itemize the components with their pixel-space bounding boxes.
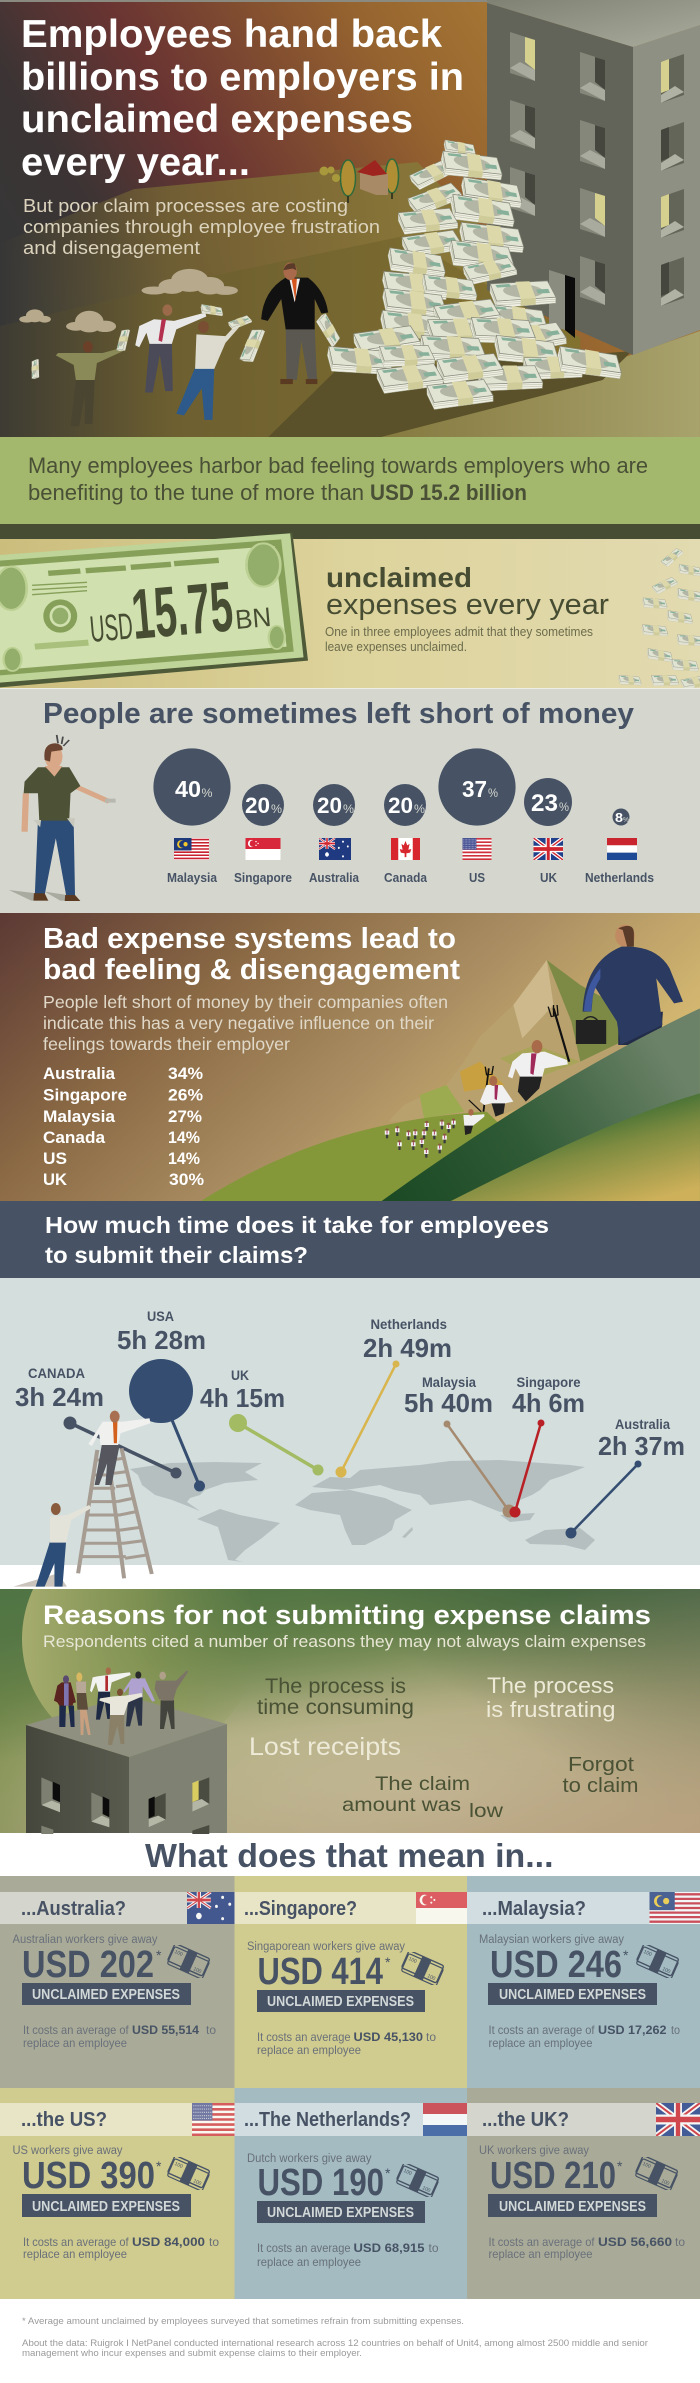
heading [43, 923, 460, 986]
group of people [54, 1667, 188, 1745]
reason: the process is time consuming [257, 1674, 414, 1719]
footnotes [22, 2316, 648, 2359]
bubble chart [153, 748, 630, 826]
bubble: Netherlands 8% [612, 808, 630, 826]
man in white shirt, back view [99, 1689, 142, 1745]
card text: UNCLAIMED EXPENSES [267, 1994, 414, 2010]
pin: Malaysia [444, 1420, 516, 1518]
panel: reasons for not submitting expense claims [0, 1589, 700, 1834]
country percentage table: 27% [168, 1107, 202, 1126]
country labels: Malaysia [167, 870, 218, 885]
card text: Australian workers give away [12, 1934, 158, 1946]
time labels: CANADA [28, 1365, 85, 1381]
subtitle: But poor claim processes are costing [23, 195, 348, 216]
card text: It costs an average of [23, 2235, 129, 2249]
country percentage table: 26% [168, 1086, 203, 1104]
time labels: 3h 24m [15, 1382, 104, 1412]
reason: the claim amount was low [342, 1773, 504, 1822]
country labels: US [469, 870, 485, 885]
card text: * [617, 2158, 623, 2174]
hills and mountain [201, 960, 670, 1201]
country percentage table: 14% [168, 1149, 200, 1168]
ladder [78, 1448, 152, 1578]
card text: replace an employee [257, 2043, 361, 2057]
flags row [174, 838, 637, 860]
card text: to [671, 2023, 680, 2037]
card text: * [156, 1947, 162, 1963]
country labels: Canada [384, 870, 428, 885]
figure: boss in black suit [261, 262, 328, 384]
bubble: US 37%: % [488, 786, 498, 800]
card text: to [675, 2235, 685, 2249]
pin: Australia [566, 1460, 642, 1538]
heading: Bad expense systems lead to [43, 923, 456, 955]
card text: * [156, 2158, 162, 2174]
country percentage table: Singapore [43, 1086, 127, 1104]
woman with blond hair [76, 1672, 91, 1735]
reason: the process is time consuming: The process is [265, 1674, 406, 1698]
card text: It costs an average [257, 2030, 351, 2044]
country percentage table [43, 1064, 204, 1189]
country labels: Netherlands [585, 870, 654, 885]
card text: to [426, 2030, 436, 2044]
card text: Singaporean workers give away [247, 1941, 405, 1953]
country labels: Australia [309, 870, 360, 885]
card text: * [385, 1954, 391, 1970]
country percentage table: Canada [43, 1128, 106, 1147]
pin: Canada [64, 1416, 182, 1478]
reason: the claim amount was low: amount was [342, 1794, 461, 1816]
title: Employees hand back [21, 13, 442, 56]
bubble: Canada 20%: % [414, 802, 425, 816]
footnotes: management who incur expenses and submit expense claims to their employer. [22, 2348, 362, 2359]
card text: It costs an average of [488, 2235, 595, 2249]
figure: man in white shirt [135, 304, 206, 393]
card text: USD 56,660 [598, 2235, 672, 2249]
statement text: benefiting to the tune of more than [28, 480, 364, 505]
reason: lost receipts: Lost receipts [249, 1733, 401, 1761]
banknote amount: USD [88, 605, 135, 650]
reason: the process is frustrating [486, 1673, 616, 1722]
flag [656, 2103, 700, 2136]
bubble: Canada 20% [384, 784, 426, 826]
world map [130, 1460, 595, 1562]
card text: replace an employee [23, 2247, 127, 2261]
card text: UK workers give away [479, 2145, 589, 2157]
country labels: Singapore [234, 870, 292, 885]
bubble: Singapore 20%: 20 [245, 793, 270, 818]
panel: UK card [467, 2088, 700, 2299]
unclaimed heading: unclaimed [326, 562, 472, 593]
card text: to [428, 2241, 439, 2255]
card text: Malaysian workers give away [479, 1934, 624, 1946]
building with group of people [26, 1667, 227, 1834]
time labels: 5h 28m [117, 1325, 206, 1355]
building windows [41, 1777, 209, 1834]
reason: the claim amount was low: The claim [375, 1773, 470, 1795]
pin: Singapore [510, 1420, 544, 1518]
card text: UNCLAIMED EXPENSES [32, 2199, 180, 2215]
person in brown jacket [54, 1675, 76, 1727]
panel: US card [0, 2088, 234, 2299]
panel: Netherlands card [234, 2088, 467, 2299]
card text: replace an employee [23, 2036, 127, 2050]
panel: Australia card [0, 1876, 234, 2088]
pin: Netherlands [336, 1360, 400, 1478]
bubble: Australia 20%: 20 [317, 793, 342, 818]
time labels: 2h 49m [363, 1333, 452, 1363]
title: every year... [21, 141, 250, 184]
body text: indicate this has a very negative influence on their [43, 1013, 434, 1033]
figures: men with ladder [13, 1411, 152, 1587]
bubble: Singapore 20% [242, 784, 284, 826]
flag [192, 2103, 234, 2136]
figure: man in white t-shirt [176, 321, 239, 420]
time labels: 2h 37m [598, 1431, 685, 1461]
bubble: Malaysia 40%: % [202, 786, 213, 800]
bubble: US 37%: 37 [462, 776, 487, 802]
subtitle: companies through employee frustration [23, 216, 380, 237]
card text: USD 246 [490, 1944, 622, 1986]
reason: the process is frustrating: is frustrating [486, 1697, 616, 1722]
card text: * [623, 1947, 629, 1963]
bubble: UK 23% [524, 778, 572, 826]
title: unclaimed expenses [21, 98, 413, 141]
heading: People are sometimes left short of money [43, 698, 634, 730]
bubble: UK 23%: % [559, 800, 569, 814]
heading: Reasons for not submitting expense claims [43, 1600, 651, 1630]
panel: unclaimed expenses [0, 533, 700, 690]
panel: green statement band [0, 437, 700, 524]
pin: UK [229, 1414, 324, 1476]
card heading: ...The Netherlands? [244, 2109, 411, 2131]
card heading: ...the UK? [482, 2109, 569, 2131]
money pile [30, 137, 625, 410]
panel: Malaysia card [467, 1876, 700, 2088]
bubble: Canada 20%: 20 [388, 793, 413, 818]
card text: UNCLAIMED EXPENSES [32, 1987, 180, 2003]
card text: replace an employee [488, 2247, 593, 2261]
panel: Singapore card [234, 1876, 467, 2088]
heading: How much time does it take for employees [45, 1212, 549, 1238]
card text: US workers give away [12, 2145, 123, 2157]
subtitle: and disengagement [23, 237, 200, 258]
card text [479, 1934, 680, 2050]
card text: USD 202 [22, 1944, 154, 1986]
unclaimed description: leave expenses unclaimed. [325, 640, 467, 654]
card text [12, 1934, 216, 2050]
country percentage table: US [43, 1149, 67, 1168]
card text: replace an employee [488, 2036, 593, 2050]
country percentage table: Malaysia [43, 1107, 116, 1126]
time labels: UK [231, 1367, 249, 1383]
figure: man with empty pockets [9, 735, 116, 901]
reason: the claim amount was low: low [469, 1800, 504, 1822]
panel: people left short of money [0, 688, 700, 913]
card text: Dutch workers give away [247, 2153, 372, 2165]
country labels: UK [540, 870, 558, 885]
flag [416, 1892, 467, 1924]
card text: to [206, 2023, 216, 2037]
bubble: Netherlands 8%: % [623, 817, 629, 824]
card text: replace an employee [257, 2255, 361, 2269]
card text: USD 414 [258, 1951, 383, 1993]
heading: to submit their claims? [45, 1242, 308, 1268]
card heading: ...Australia? [21, 1898, 126, 1920]
footnotes: About the data: Ruigrok I NetPanel conducted international research across 12 countries on behalf of Unit4, among almost 2500 middle and senior [22, 2338, 648, 2349]
country labels [167, 870, 654, 885]
body text: People left short of money by their companies often [43, 992, 448, 1012]
card text: to [209, 2235, 219, 2249]
unclaimed description [325, 625, 593, 654]
banknote amount: BN [234, 602, 272, 635]
icon: distant house and trees [320, 159, 398, 203]
bubble: Malaysia 40%: 40 [175, 776, 201, 802]
icon: banknote [0, 533, 308, 687]
country percentage table: 34% [168, 1064, 203, 1083]
card text: UNCLAIMED EXPENSES [267, 2205, 414, 2221]
panel: hero [0, 0, 700, 437]
card text: USD 68,915 [354, 2241, 425, 2255]
man on ladder [88, 1411, 150, 1485]
pin: USA [129, 1359, 205, 1492]
heading: what does that mean in: What does that mean in... [145, 1837, 554, 1874]
time labels [15, 1308, 685, 1461]
card text: It costs an average [257, 2241, 351, 2255]
country percentage table: 14% [168, 1128, 200, 1147]
panel: time to submit claims [0, 1201, 700, 1587]
man on ground [36, 1503, 91, 1587]
card text [479, 2145, 685, 2261]
unclaimed heading [326, 562, 609, 621]
title: billions to employers in [21, 56, 464, 99]
card text: USD 84,000 [132, 2235, 205, 2249]
bubble: Australia 20%: % [343, 802, 354, 816]
reason: the process is frustrating: The process [487, 1673, 614, 1698]
time labels: 5h 40m [404, 1388, 493, 1418]
banknote amount: 15.75 [129, 567, 236, 655]
time labels: 4h 6m [512, 1388, 585, 1418]
bubble: UK 23%: 23 [531, 790, 558, 817]
crowd of tiny employees [385, 1118, 456, 1158]
card text [247, 1941, 445, 2057]
bubble: Malaysia 40% [153, 748, 231, 826]
card text: USD 210 [490, 2155, 616, 2197]
card heading: ...Singapore? [244, 1898, 357, 1920]
flag [187, 1892, 234, 1924]
body text: feelings towards their employer [43, 1034, 290, 1054]
man in grey t-shirt [155, 1671, 188, 1729]
unclaimed description: One in three employees admit that they sometimes [325, 625, 593, 639]
heading: bad feeling & disengagement [43, 954, 460, 986]
building [487, 0, 700, 355]
country percentage table: 30% [169, 1170, 204, 1189]
subheading: Respondents cited a number of reasons they may not always claim expenses [43, 1632, 646, 1651]
bubble: Netherlands 8%: 8 [615, 810, 623, 825]
card text: UNCLAIMED EXPENSES [499, 2199, 646, 2215]
man in white shirt and red tie [90, 1667, 131, 1720]
subtitle [23, 195, 380, 258]
bubble: US 37% [438, 748, 516, 826]
figure: giant boss with briefcase [576, 925, 683, 1045]
small money pile [618, 547, 700, 690]
card heading: ...the US? [21, 2109, 107, 2131]
statement text [28, 453, 648, 505]
card text: * [385, 2165, 391, 2181]
time labels: 4h 15m [200, 1383, 285, 1413]
reason: forgot to claim [562, 1753, 638, 1797]
reason: the process is time consuming: time consuming [257, 1695, 414, 1719]
title [21, 13, 464, 184]
unclaimed heading: expenses every year [326, 589, 609, 621]
clouds [19, 269, 238, 332]
statement text: USD 15.2 billion [370, 480, 527, 505]
time labels: Singapore [516, 1374, 581, 1390]
figures: managers with pitchforks [463, 1005, 569, 1135]
time labels: Malaysia [422, 1374, 476, 1390]
hero landscape ground [0, 162, 700, 437]
panel: bad expense systems [0, 913, 700, 1201]
figures handing back money [56, 262, 328, 426]
heading [45, 1212, 549, 1268]
card text: USD 190 [258, 2162, 384, 2204]
footnotes: * Average amount unclaimed by employees surveyed that sometimes refrain from submitting expenses. [22, 2316, 464, 2327]
card text: USD 45,130 [354, 2030, 423, 2044]
bubble: Singapore 20%: % [271, 802, 282, 816]
card text: USD 17,262 [598, 2023, 667, 2037]
card text: UNCLAIMED EXPENSES [499, 1987, 646, 2003]
bubble: Australia 20% [313, 784, 355, 826]
country percentage table: Australia [43, 1064, 116, 1083]
body text [43, 992, 448, 1054]
statement text: Many employees harbor bad feeling towards employers who are [28, 453, 648, 478]
flag [423, 2103, 467, 2136]
card text: USD 390 [22, 2155, 155, 2197]
card text [12, 2145, 219, 2261]
reason: forgot to claim: to claim [562, 1774, 638, 1797]
card heading: ...Malaysia? [482, 1898, 586, 1920]
country percentage table: UK [43, 1170, 68, 1189]
flag [650, 1892, 700, 1924]
figure: man in olive sweater [56, 341, 123, 426]
reason: forgot to claim: Forgot [568, 1753, 634, 1776]
card text: USD 55,514 [132, 2023, 199, 2037]
hillside [382, 1008, 700, 1201]
card text [247, 2153, 440, 2269]
time labels: USA [147, 1308, 174, 1324]
time labels: Australia [615, 1416, 670, 1432]
card text: It costs an average of [23, 2023, 129, 2037]
card text: It costs an average of [488, 2023, 595, 2037]
banknote amount [88, 567, 272, 655]
man in purple shirt [123, 1671, 155, 1726]
time labels: Netherlands [370, 1316, 447, 1332]
